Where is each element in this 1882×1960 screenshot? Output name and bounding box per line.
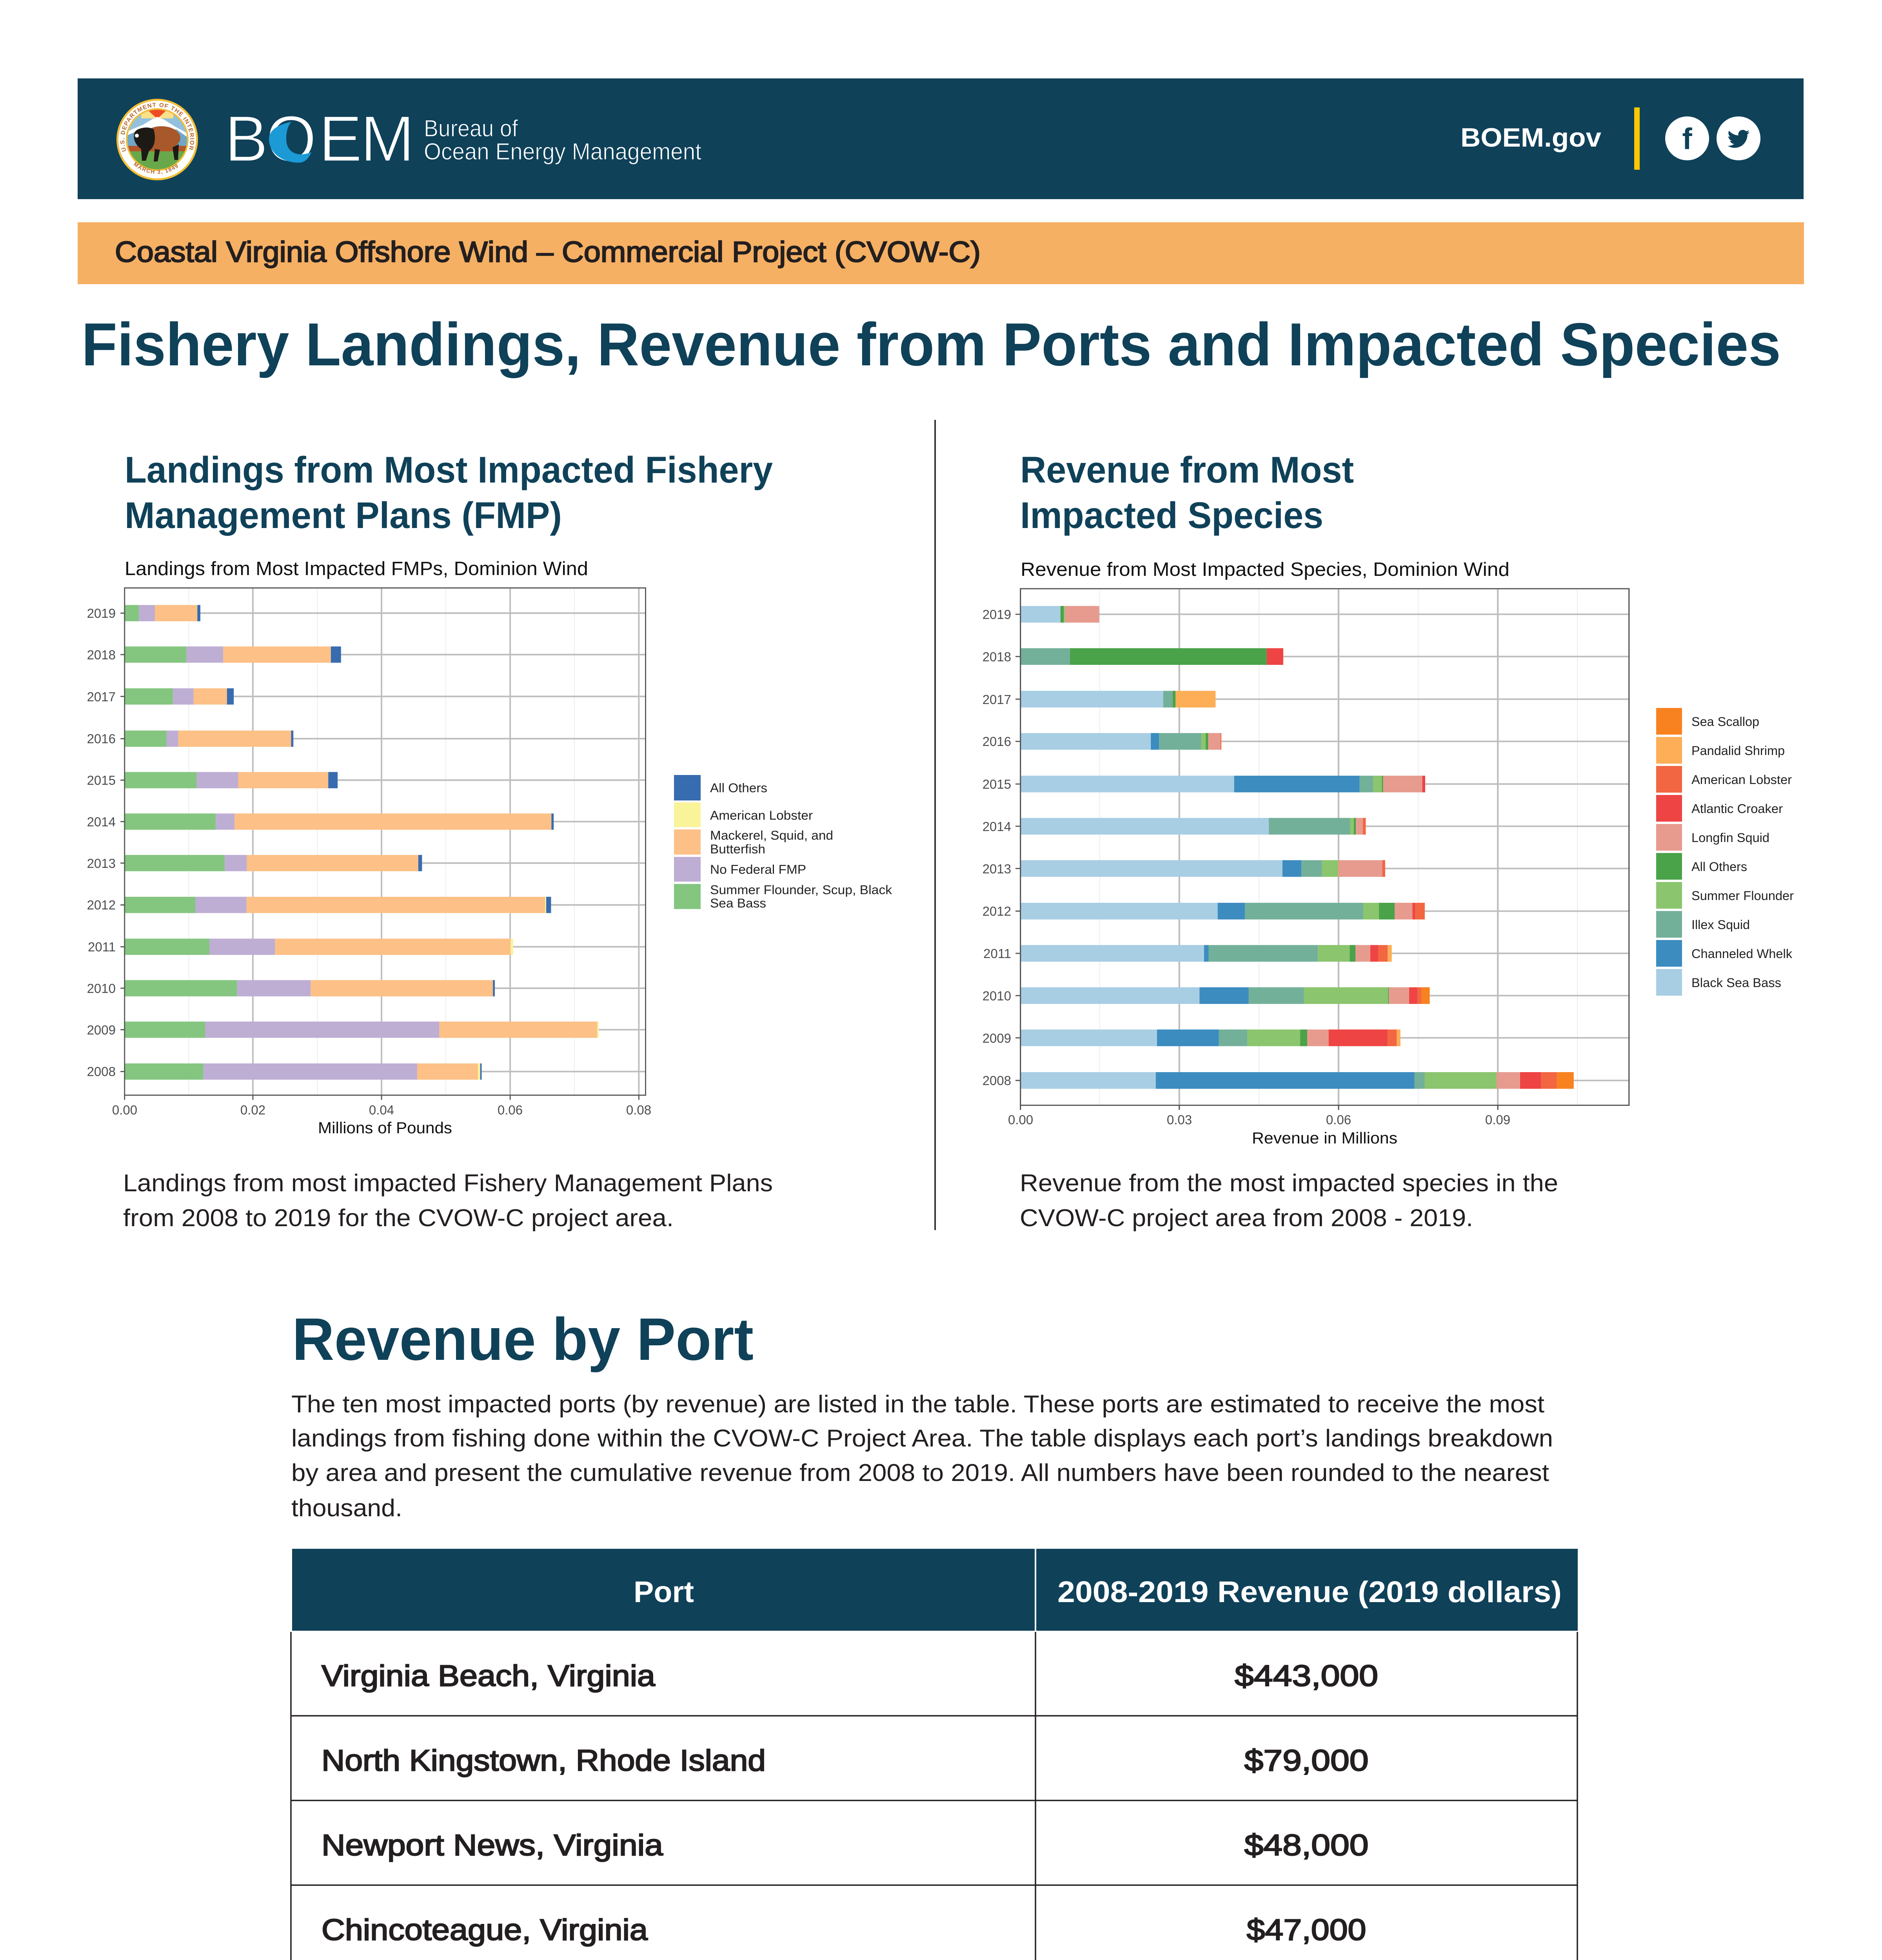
legend item: Atlantic Croaker xyxy=(1656,795,1783,822)
legend item: Illex Squid xyxy=(1656,911,1750,938)
bar 2017 xyxy=(125,688,234,704)
x axis values: 0.06 xyxy=(498,1103,523,1117)
bar 2015 xyxy=(125,772,338,788)
legend item: All Others: All Others xyxy=(1691,860,1747,874)
y axis years: 2016 xyxy=(87,731,116,746)
bar 2013 xyxy=(1021,860,1385,877)
logo: bureau name xyxy=(424,115,701,165)
legend item: Mackerel, Squid, and Butterfish: Butterfish xyxy=(710,842,765,856)
bar 2009 xyxy=(125,1022,599,1038)
row: Chincoteague: $47,000 xyxy=(1247,1913,1366,1947)
bar 2011 xyxy=(125,938,513,955)
y axis years: 2019 xyxy=(87,606,116,621)
y axis years: 2012 xyxy=(983,904,1011,918)
table header xyxy=(292,1549,1578,1631)
legend item: Summer Flounder, Scup, Black Sea Bass: Sea Bass xyxy=(710,896,766,910)
legend item: Summer Flounder, Scup, Black Sea Bass: Summer Flounder, Scup, Black xyxy=(710,883,892,897)
legend item: Summer Flounder xyxy=(1656,882,1794,909)
bar 2018 xyxy=(1021,648,1283,665)
y axis years: 2013 xyxy=(87,856,116,871)
bar 2015 xyxy=(1021,776,1425,792)
bar 2011 xyxy=(1021,945,1392,962)
intro paragraph xyxy=(291,1391,1553,1522)
logo: BOEM wordmark: B xyxy=(225,103,268,175)
icon: Department of the Interior seal xyxy=(116,99,198,180)
row: Newport News: $48,000 xyxy=(1244,1829,1368,1862)
bar 2018 xyxy=(125,646,341,663)
chart: landings from most impacted FMPs xyxy=(87,558,651,1137)
yellow separator xyxy=(1634,107,1640,170)
bar 2012 xyxy=(125,897,551,913)
legend item: American Lobster: American Lobster xyxy=(710,808,813,822)
row: Newport News: Newport News, Virginia xyxy=(322,1829,663,1862)
table: revenue by port xyxy=(291,1549,1578,1960)
x axis values: 0.00 xyxy=(112,1103,137,1117)
legend item: Channeled Whelk xyxy=(1656,940,1793,967)
intro paragraph: The ten most impacted ports (by revenue) are listed in the table. These ports are estimated to receive the most xyxy=(291,1391,1544,1418)
legend item: No Federal FMP xyxy=(674,857,806,882)
legend item: Channeled Whelk: Channeled Whelk xyxy=(1691,947,1793,961)
row: North Kingstown xyxy=(322,1744,1368,1777)
y axis years: 2016 xyxy=(983,734,1011,749)
row: North Kingstown: North Kingstown, Rhode Island xyxy=(322,1744,766,1777)
caption: revenue: CVOW-C project area from 2008 - 2019. xyxy=(1020,1205,1473,1232)
table header: 2008-2019 Revenue (2019 dollars) xyxy=(1057,1575,1562,1609)
legend item: Sea Scallop: Sea Scallop xyxy=(1691,715,1759,729)
logo: BOEM wordmark: M xyxy=(360,103,414,175)
y axis years: 2018 xyxy=(983,650,1011,664)
heading: revenue: Revenue from Most xyxy=(1020,449,1354,491)
legend item: Atlantic Croaker: Atlantic Croaker xyxy=(1691,802,1783,816)
bar 2016 xyxy=(125,731,293,747)
logo: BOEM wordmark xyxy=(225,103,414,175)
icon: facebook xyxy=(1665,116,1709,160)
y axis years: 2010 xyxy=(87,981,116,996)
legend item: Black Sea Bass xyxy=(1656,969,1781,996)
x axis values: 0.02 xyxy=(240,1103,265,1117)
seal ring text: U.S. DEPARTMENT OF THE INTERIOR xyxy=(119,102,195,152)
legend item: Mackerel, Squid, and Butterfish: Mackerel, Squid, and xyxy=(710,828,833,842)
row: Chincoteague xyxy=(322,1913,1366,1947)
legend item: No Federal FMP: No Federal FMP xyxy=(710,862,806,877)
caption: landings: from 2008 to 2019 for the CVOW-C project area. xyxy=(123,1205,674,1232)
y axis years: 2010 xyxy=(983,989,1011,1003)
bar 2017 xyxy=(1021,691,1215,708)
legend item: Longfin Squid: Longfin Squid xyxy=(1691,831,1769,845)
legend item: Mackerel, Squid, and Butterfish xyxy=(674,828,833,856)
heading: landings xyxy=(125,449,773,536)
bar 2008 xyxy=(125,1063,481,1080)
bar 2014 xyxy=(125,813,554,830)
y axis years: 2015 xyxy=(983,777,1011,791)
heading: revenue by port: Revenue by Port xyxy=(292,1306,754,1373)
caption: revenue: Revenue from the most impacted species in the xyxy=(1020,1170,1558,1197)
x axis values: 0.09 xyxy=(1485,1112,1510,1127)
y axis years: 2008 xyxy=(87,1064,116,1079)
bar 2010 xyxy=(1021,987,1430,1004)
x axis values: 0.08 xyxy=(626,1103,651,1117)
logo: BOEM wordmark: E xyxy=(319,103,362,175)
y axis years: 2018 xyxy=(87,648,116,662)
legend item: American Lobster xyxy=(674,802,813,827)
website label: BOEM.gov xyxy=(1461,123,1601,152)
intro paragraph: by area and present the cumulative revenue from 2008 to 2019. All numbers have been rounded to the nearest xyxy=(291,1459,1549,1486)
icon: blue wave in the O xyxy=(269,122,311,163)
heading: revenue xyxy=(1020,449,1354,536)
bar 2010 xyxy=(125,980,495,996)
logo: bureau name: Bureau of xyxy=(424,115,518,142)
y axis years: 2013 xyxy=(983,862,1011,876)
header band xyxy=(78,78,1804,199)
bar 2019 xyxy=(1021,606,1099,622)
x axis values: 0.00 xyxy=(1008,1112,1033,1127)
legend item: Summer Flounder, Scup, Black Sea Bass xyxy=(674,883,892,910)
icon: twitter xyxy=(1717,116,1760,160)
project banner xyxy=(78,222,1804,284)
caption: revenue xyxy=(1020,1170,1558,1232)
x axis values: 0.03 xyxy=(1167,1112,1192,1127)
y axis years: 2009 xyxy=(983,1031,1011,1045)
legend item: Pandalid Shrimp xyxy=(1656,737,1785,764)
x axis values xyxy=(112,1103,651,1117)
heading: landings: Management Plans (FMP) xyxy=(125,495,562,536)
legend item: Sea Scallop xyxy=(1656,708,1759,735)
y axis years: 2011 xyxy=(983,946,1011,961)
chart: revenue from most impacted species xyxy=(983,559,1629,1147)
y axis years xyxy=(983,607,1011,1088)
heading: landings: Landings from Most Impacted Fishery xyxy=(125,449,773,491)
table header: Port xyxy=(634,1575,694,1609)
legend item: Illex Squid: Illex Squid xyxy=(1691,918,1750,932)
x axis values: 0.06 xyxy=(1326,1112,1351,1127)
bar 2009 xyxy=(1021,1029,1401,1046)
y axis years xyxy=(87,606,116,1079)
row: North Kingstown: $79,000 xyxy=(1244,1744,1368,1777)
legend item: All Others xyxy=(674,775,767,800)
y axis years: 2012 xyxy=(87,898,116,912)
project banner: Coastal Virginia Offshore Wind – Commercial Project (CVOW-C) xyxy=(115,236,981,268)
legend item: Pandalid Shrimp: Pandalid Shrimp xyxy=(1691,744,1785,758)
caption: landings: Landings from most impacted Fishery Management Plans xyxy=(123,1170,773,1197)
caption: landings xyxy=(123,1170,773,1232)
y axis years: 2015 xyxy=(87,773,116,788)
seal ring text: MARCH 3, 1849 xyxy=(133,161,179,175)
bar 2019 xyxy=(125,605,200,621)
y axis years: 2014 xyxy=(983,819,1011,834)
intro paragraph: thousand. xyxy=(291,1495,402,1522)
legend item: All Others: All Others xyxy=(710,781,767,795)
legend item: American Lobster xyxy=(1656,766,1792,793)
y axis years: 2017 xyxy=(983,692,1011,707)
y axis years: 2014 xyxy=(87,815,116,829)
bar 2013 xyxy=(125,855,422,871)
row: Virginia Beach xyxy=(322,1659,1378,1693)
legend item: Summer Flounder: Summer Flounder xyxy=(1691,889,1794,903)
seal ring text xyxy=(119,102,195,175)
legend item: Black Sea Bass: Black Sea Bass xyxy=(1691,976,1781,990)
bar 2014 xyxy=(1021,818,1366,835)
bar 2016 xyxy=(1021,733,1221,750)
heading: revenue: Impacted Species xyxy=(1020,495,1323,536)
intro paragraph: landings from fishing done within the CVOW-C Project Area. The table displays each port’s landings breakdown xyxy=(291,1425,1553,1452)
legend item: All Others xyxy=(1656,853,1747,880)
y axis years: 2017 xyxy=(87,690,116,704)
x axis title: Millions of Pounds xyxy=(318,1119,452,1137)
y axis years: 2008 xyxy=(983,1073,1011,1088)
bar 2008 xyxy=(1021,1072,1574,1089)
row: Virginia Beach: $443,000 xyxy=(1235,1659,1378,1693)
legend: FMPs xyxy=(674,775,892,910)
legend: species xyxy=(1656,708,1794,996)
x axis title: Revenue in Millions xyxy=(1252,1129,1397,1147)
row: Newport News xyxy=(322,1829,1368,1862)
title: Fishery Landings, Revenue from Ports and Impacted Species xyxy=(82,310,1781,378)
y axis years: 2011 xyxy=(88,940,116,954)
row: Chincoteague: Chincoteague, Virginia xyxy=(322,1913,648,1947)
bar 2012 xyxy=(1021,903,1425,920)
y axis years: 2009 xyxy=(87,1023,116,1037)
x axis values xyxy=(1008,1112,1510,1127)
divider between charts xyxy=(934,420,936,1230)
chart title: Revenue from Most Impacted Species, Dominion Wind xyxy=(1021,559,1510,580)
row: Virginia Beach: Virginia Beach, Virginia xyxy=(322,1659,656,1693)
legend item: American Lobster: American Lobster xyxy=(1691,773,1792,787)
icon: facebook: f xyxy=(1682,122,1692,156)
y axis years: 2019 xyxy=(983,607,1011,622)
legend item: Longfin Squid xyxy=(1656,824,1769,851)
logo: bureau name: Ocean Energy Management xyxy=(424,138,701,165)
logo: BOEM wordmark: O xyxy=(266,103,316,175)
chart title: Landings from Most Impacted FMPs, Dominion Wind xyxy=(125,558,588,579)
x axis values: 0.04 xyxy=(369,1103,394,1117)
